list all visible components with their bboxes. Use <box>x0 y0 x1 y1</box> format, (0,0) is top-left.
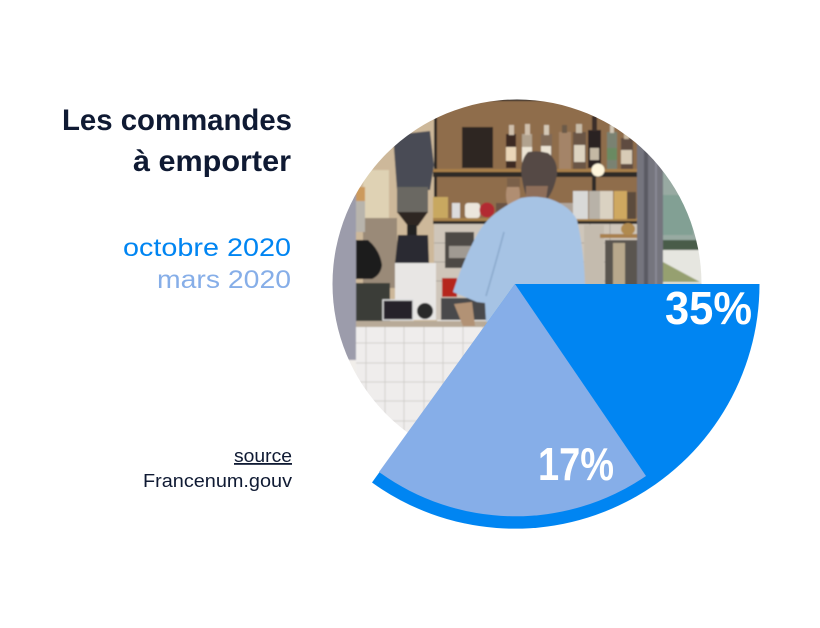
wood panelling <box>434 96 640 224</box>
grey door <box>636 144 664 284</box>
title: Les commandes <box>62 104 292 137</box>
value: 35%: 35% <box>665 282 752 334</box>
pie chart <box>372 282 760 529</box>
beige wall <box>355 110 437 325</box>
shelves <box>433 169 638 172</box>
legend <box>123 234 291 294</box>
bottles <box>506 116 633 169</box>
source <box>143 446 292 491</box>
left pillar and cups <box>330 190 356 360</box>
bag on top shelf <box>462 127 493 168</box>
infographic <box>64 100 760 529</box>
legend: mars 2020 <box>157 266 291 294</box>
value: 17%: 17% <box>538 438 614 490</box>
tile wall under shelves <box>434 224 640 320</box>
coffee machine <box>445 232 474 268</box>
counter <box>356 321 506 327</box>
title: à emporter <box>133 145 291 178</box>
shelf items <box>433 197 573 218</box>
legend: octobre 2020 <box>123 234 291 262</box>
boxes <box>573 191 636 219</box>
right of man <box>584 226 604 284</box>
window <box>662 170 702 284</box>
circular photo: coffee shop counter <box>332 100 702 432</box>
kettle <box>356 240 382 279</box>
black sign and jar <box>383 300 413 320</box>
menu <box>395 263 436 320</box>
bulb <box>592 164 604 176</box>
source: source <box>234 446 292 466</box>
grinder <box>393 131 434 263</box>
sector: octobre 2020, 35% <box>372 284 760 529</box>
sector: mars 2020, 17% <box>379 284 646 516</box>
title <box>62 104 292 178</box>
source: Francenum.gouv <box>143 471 292 491</box>
woman behind <box>506 186 520 205</box>
man <box>453 151 585 326</box>
